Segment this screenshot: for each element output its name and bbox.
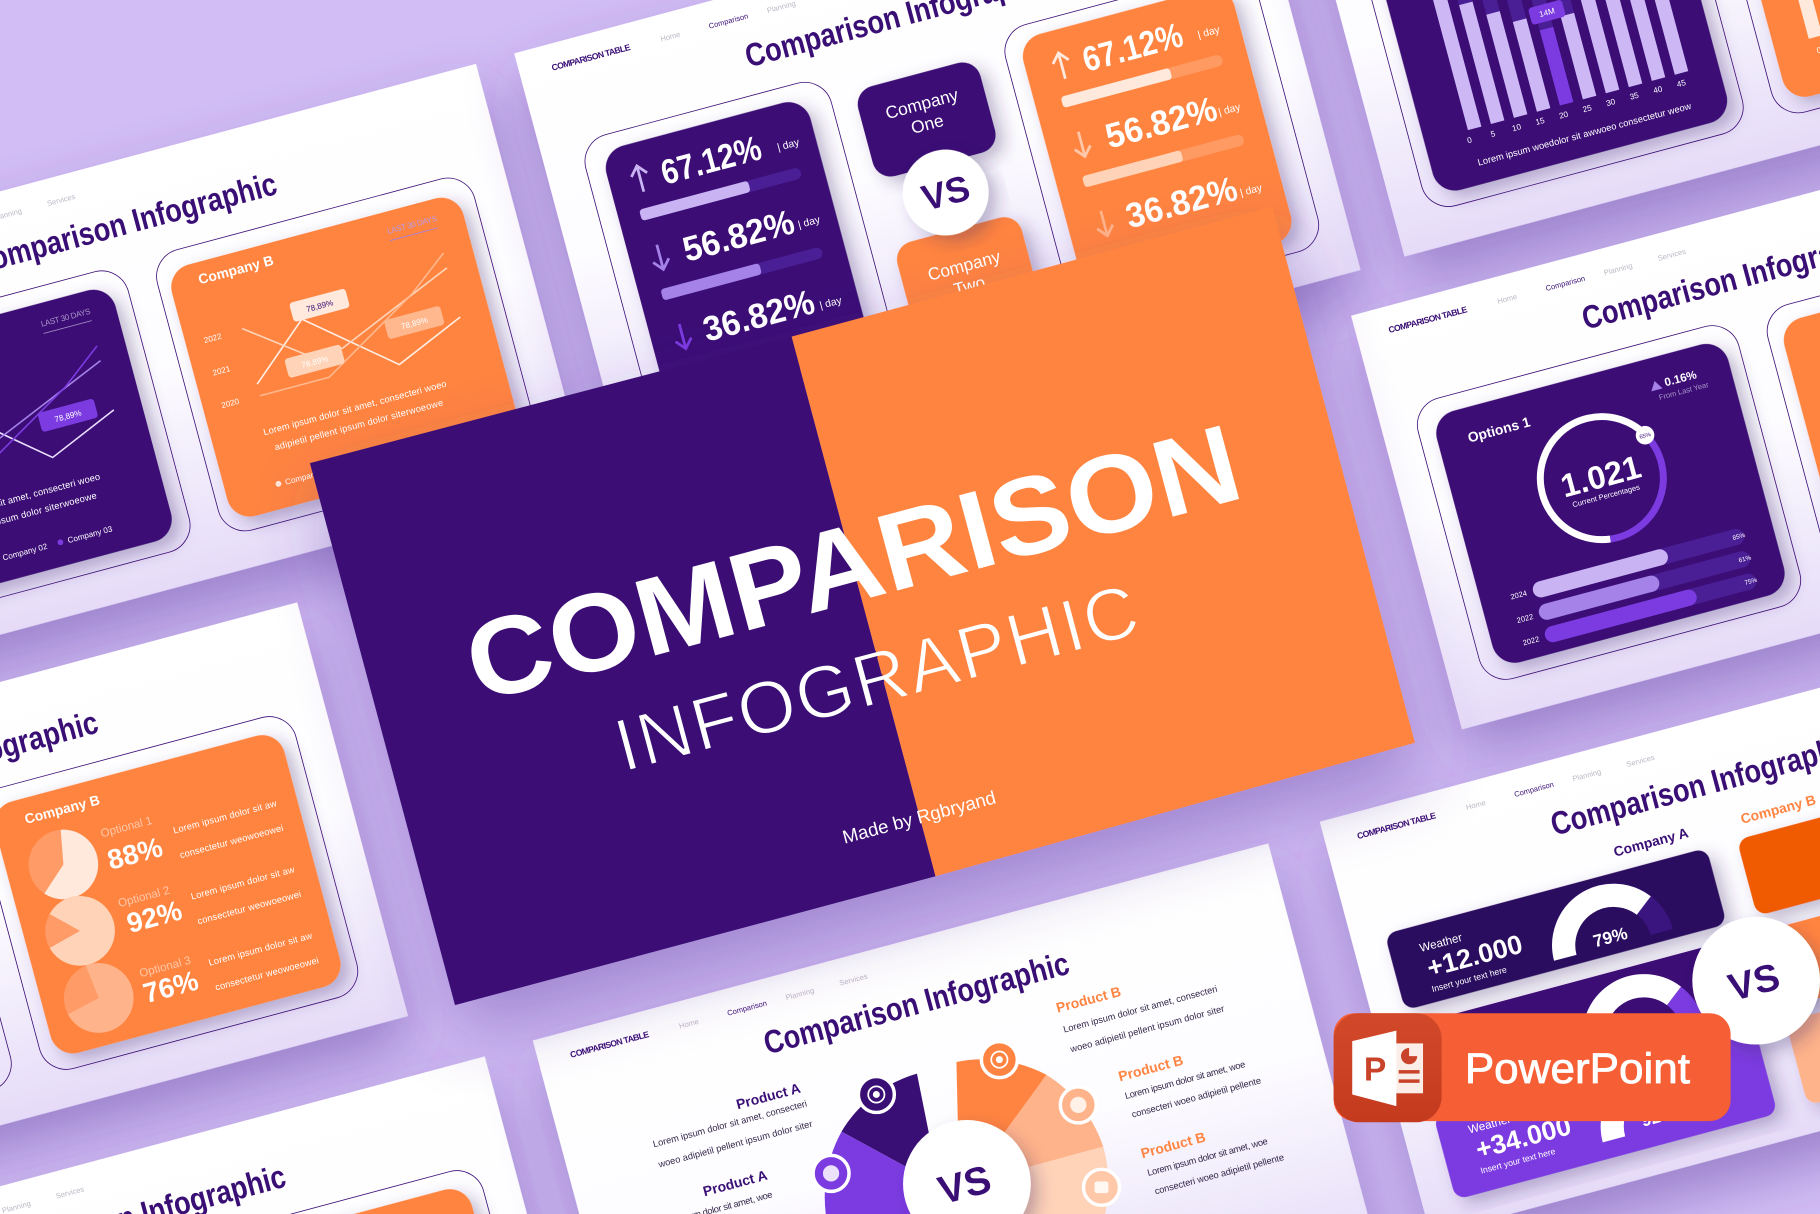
panel: company two stats: | day [1217,102,1243,118]
main title: COMPARISON [453,401,1253,726]
panel: company one stats: 56.82% [679,203,799,270]
slide: ring gauge comparison [1351,119,1820,729]
panel: company B pies: 88% [104,831,166,876]
panel: options 1 ring chart [1431,339,1790,668]
panel: purple card: 92% [1639,1102,1678,1131]
text block: product B: Lorem ipsum dolor sit amet, woe [1146,1136,1269,1178]
text block: product B: Product B [1139,1129,1207,1161]
panel: company B line chart: 78,89% [400,316,429,331]
slide: product wheel comparison: Services [838,971,869,988]
panel: options 1 ring chart: 75% [1744,577,1758,587]
PowerPoint badge [1334,1013,1731,1122]
panel: dark bar chart: 15 [1535,116,1546,127]
slide: bottom left partial [0,1056,596,1214]
panel: orange card [177,1184,533,1214]
text block: product A: woeo adipietil pellent ipsum dolor siter [656,1119,813,1170]
panel: company B pies: 92% [123,895,186,939]
subtitle: INFOGRAPHIC [606,568,1147,787]
slide: gauge cards comparison: Services [1625,753,1656,769]
panel: company B line chart: 78,89% [300,354,329,370]
slide: product wheel comparison: Comparison [726,999,768,1018]
panel: options 1 ring chart: 2022 [1516,612,1534,625]
slide: product wheel comparison [533,843,1379,1214]
panel: company B line chart: 2022 [203,332,223,345]
chart: product wheel [813,1042,1120,1214]
panel: dark card weather gauge: 79% [1591,923,1630,951]
panel: options 1 ring chart: Current Percentages [1571,483,1641,509]
panel: company B line chart: LAST 30 DAYS [386,214,439,236]
slide: percentage bars comparison: COMPARISON TABLE [550,42,632,73]
panel: options 2 card [1779,246,1820,575]
chart: product wheel: VS [934,1157,996,1213]
panel: company B pies: Optional 3 [138,954,192,980]
panel: company B pies: consectetur weowoeowei [214,955,320,992]
panel: orange bar chart [1721,0,1820,102]
panel: options 1 ring chart: 85% [1732,532,1746,542]
panel: purple card: Weather [1467,1113,1512,1137]
panel: orange column [1737,751,1820,1105]
slide: product wheel comparison: COMPARISON TABLE [569,1029,650,1060]
text block: product B: consecteri woeo adipietil pellente [1131,1075,1262,1120]
panel: dark bar chart: 35 [1629,91,1640,102]
author credit: Made by Rgbryand [840,786,998,848]
panel: company B pies: Optional 2 [117,884,171,910]
text block: product A: Product A [734,1080,802,1112]
slide: line chart comparison: Services [46,192,76,208]
panel: dark bar chart: 30 [1605,97,1617,108]
panel: company one stats: | day [797,214,822,231]
panel: options 1 ring chart: From Last Year [1658,380,1710,402]
panel: company B pies: Lorem ipsum dolor sit aw [172,798,278,836]
slide: gauge cards comparison: Company A [1612,824,1690,860]
VS badge: VS [1724,955,1784,1010]
slide: line chart comparison [0,64,587,675]
panel: company B pies: consectetur weowoeowei [196,889,302,926]
VS badge [1692,917,1820,1045]
text block: product A: Lorem ipsum dolor sit amet, consecteri [652,1099,808,1149]
slide: product wheel comparison: Home [678,1017,700,1031]
panel: company B pies: Lorem ipsum dolor sit aw [190,864,296,902]
icon: PowerPoint [1334,1013,1442,1122]
panel: dark card weather gauge: +12.000 [1424,929,1526,983]
slide: gauge cards comparison [1320,625,1820,1214]
panel: options 1 ring chart: Options 1 [1466,413,1532,446]
slide: ring gauge comparison: Home [1496,292,1518,306]
panel: dark card weather gauge: Weather [1418,931,1464,955]
panel: company A line chart: Company 03 [67,524,114,545]
panel: company B line chart: 2020 [220,397,241,410]
panel: company A line chart: Company 02 [2,542,49,562]
slide: ring gauge comparison: COMPARISON TABLE [1387,304,1469,335]
PowerPoint badge: PowerPoint [1465,1045,1690,1093]
panel: dark bar chart: 0 [1466,135,1473,145]
slide: gauge cards comparison: COMPARISON TABLE [1356,810,1437,841]
slide: bottom left partial: Services [55,1184,85,1201]
panel: company B line chart: Company 01 [284,466,331,487]
slide: percentage bars comparison: Comparison [708,11,749,31]
panel: company B pies: 76% [140,965,202,1009]
slide: ring gauge comparison: Services [1657,247,1687,263]
panel: company B line chart: adipietil pellent ipsum dolor siterwoeowe [273,398,444,452]
text block: product B: Lorem ipsum dolor sit amet, consecteri [1062,984,1218,1035]
panel: company one stats: 67.12% [657,128,766,193]
panel: company one stats: | day [819,295,844,312]
panel: company B pies: Optional 1 [99,814,154,840]
slide: gauge cards comparison: Planning [1571,767,1602,783]
slide: gauge cards comparison: Home [1465,798,1487,812]
text block: product A [625,1079,828,1214]
panel: company two label: Company [925,246,1003,285]
panel: company B line chart: Lorem ipsum dolor sit amet, consecteri woeo [262,379,448,437]
panel: company one label: One [909,110,946,138]
panel: dark bar chart: 25 [1582,103,1593,114]
panel: company one label: Company [883,84,961,123]
panel: middle dark card [1409,940,1752,1102]
panel: purple card [1433,1029,1778,1200]
slide: ring gauge comparison: Planning [1603,261,1633,277]
panel: company B line chart: 78,89% [305,298,334,314]
panel: company one label [854,58,1000,181]
panel: options 1 ring chart: 0.16% [1663,368,1698,389]
panel: company one stats [601,97,872,404]
panel: dark bar chart: 5 [1490,129,1497,139]
panel: purple card: +34.000 [1472,1110,1574,1165]
panel: options 1 ring chart: 2024 [1509,588,1528,602]
panel: company two stats: 36.82% [1122,169,1242,236]
slide: ring gauge comparison: Comparison [1545,274,1586,293]
panel: company two stats: | day [1239,183,1264,199]
panel: company one stats: 36.82% [699,282,819,350]
panel: options 1 ring chart: 1.021 [1557,449,1645,504]
panel: company two stats: 56.82% [1101,89,1221,156]
panel: dark card weather gauge [1385,848,1727,1010]
icon: PowerPoint: P [1364,1052,1386,1089]
panel: company B line chart: 2021 [212,364,232,378]
panel: dark bar chart: 14M [1538,6,1556,19]
panel: dark bar chart: 45 [1676,78,1687,89]
slide: percentage bars comparison [514,0,1361,467]
panel: dark bar chart [1371,0,1732,196]
panel: company two label: Two [951,272,987,299]
text block: product B [1054,953,1285,1209]
VS badge [893,140,998,245]
panel: dark bar chart: 10 [1511,122,1523,133]
text block: product B: consecteri woeo adipietil pellente [1154,1152,1285,1196]
panel: company A line chart [0,285,177,614]
panel: options 1 ring chart: 65% [1639,432,1652,441]
panel: company A line chart: 78,89% [54,408,83,424]
panel: company A line chart: LAST 30 DAYS [40,307,92,329]
panel: company B pies: Lorem ipsum dolor sit aw [207,930,314,968]
text block: product A: Product A [701,1167,769,1199]
panel: company B pies [0,730,346,1059]
panel: options 1 ring chart: 61% [1738,554,1752,564]
slide: pie chart comparison [0,602,408,1213]
text block: product B: Product B [1117,1052,1185,1084]
slide: percentage bars comparison: Home [659,30,681,44]
panel: purple card: Insert your text here [1479,1146,1557,1176]
panel: company B line chart: Company B [196,252,275,287]
slide: bar chart comparison [1294,0,1820,257]
panel: dark card weather gauge: Insert your text here [1431,964,1508,994]
panel: company two label [893,213,1044,347]
panel: company one stats: | day [776,137,801,154]
slide title: Comparison Infographic [760,945,1073,1061]
panel: company B pies: consectetur weowoeowei [179,823,284,860]
main cover card [310,207,1415,1005]
panel: dark bar chart: Lorem ipsum woedolor sit awwoeo consectetur weow [1477,101,1693,168]
panel: dark bar chart: 40 [1652,84,1664,95]
slide: gauge cards comparison: Comparison [1513,780,1555,799]
panel: company B line chart [166,193,525,522]
panel: company two stats: 67.12% [1078,16,1187,80]
panel: company two stats [1018,0,1297,294]
text block: product B: Lorem ipsum dolor sit amet, woe [1124,1059,1246,1101]
panel: dark bar chart: 20 [1558,110,1570,121]
panel: company B pies: Company B [23,791,102,827]
text block: product B: Product B [1054,983,1123,1016]
slide: product wheel comparison: Planning [785,986,815,1002]
panel: options 1 ring chart: 2022 [1522,634,1540,647]
slide: gauge cards comparison: Company B [1739,791,1818,827]
panel: company two stats: | day [1197,24,1222,41]
text block: product B: woeo adipietil pellent ipsum dolor siter [1068,1004,1225,1055]
VS badge: VS [917,167,974,219]
